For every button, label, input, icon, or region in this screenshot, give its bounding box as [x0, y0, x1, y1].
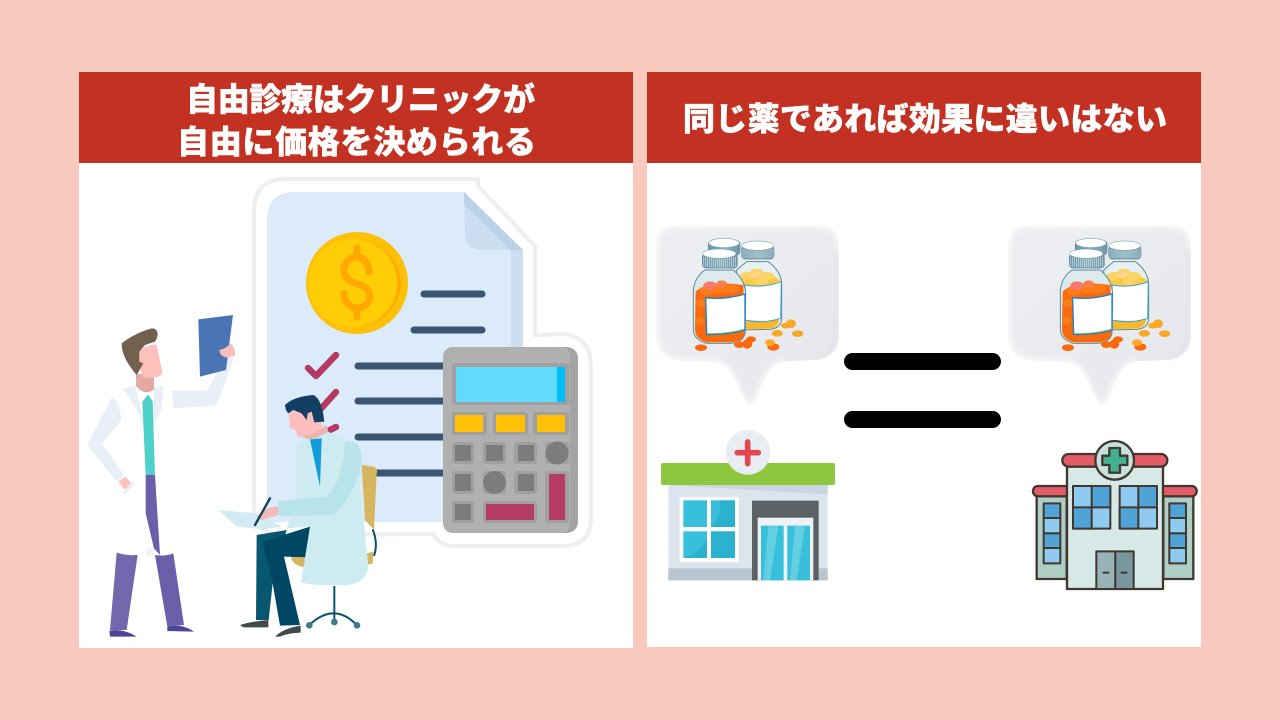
- heading band: left: 自由に価格を決められる: [177, 124, 536, 160]
- heading band: right: [647, 72, 1201, 163]
- speech bubble: clinic medicine: [656, 226, 839, 404]
- illustration: price document: [254, 179, 591, 546]
- icon: check marks: [308, 355, 336, 432]
- heading band: right: 同じ薬であれば効果に違いはない: [683, 101, 1167, 137]
- speech bubble: hospital medicine: [1008, 226, 1191, 404]
- icon: dollar coin: [306, 232, 408, 334]
- panel: left, free pricing: [79, 72, 633, 648]
- illustration: standing doctor: [87, 315, 235, 637]
- illustration: seated doctor: [218, 395, 377, 637]
- list lines: [358, 294, 482, 473]
- icon: calculator: [443, 347, 578, 533]
- icon: hospital building: [1033, 441, 1197, 589]
- heading band: left: 自由診療はクリニックが: [186, 82, 535, 118]
- panel: right, same medicine same effect: [647, 72, 1201, 647]
- heading band: left: [79, 72, 633, 163]
- icon: clinic building: [661, 430, 835, 580]
- equals sign: [844, 353, 1001, 428]
